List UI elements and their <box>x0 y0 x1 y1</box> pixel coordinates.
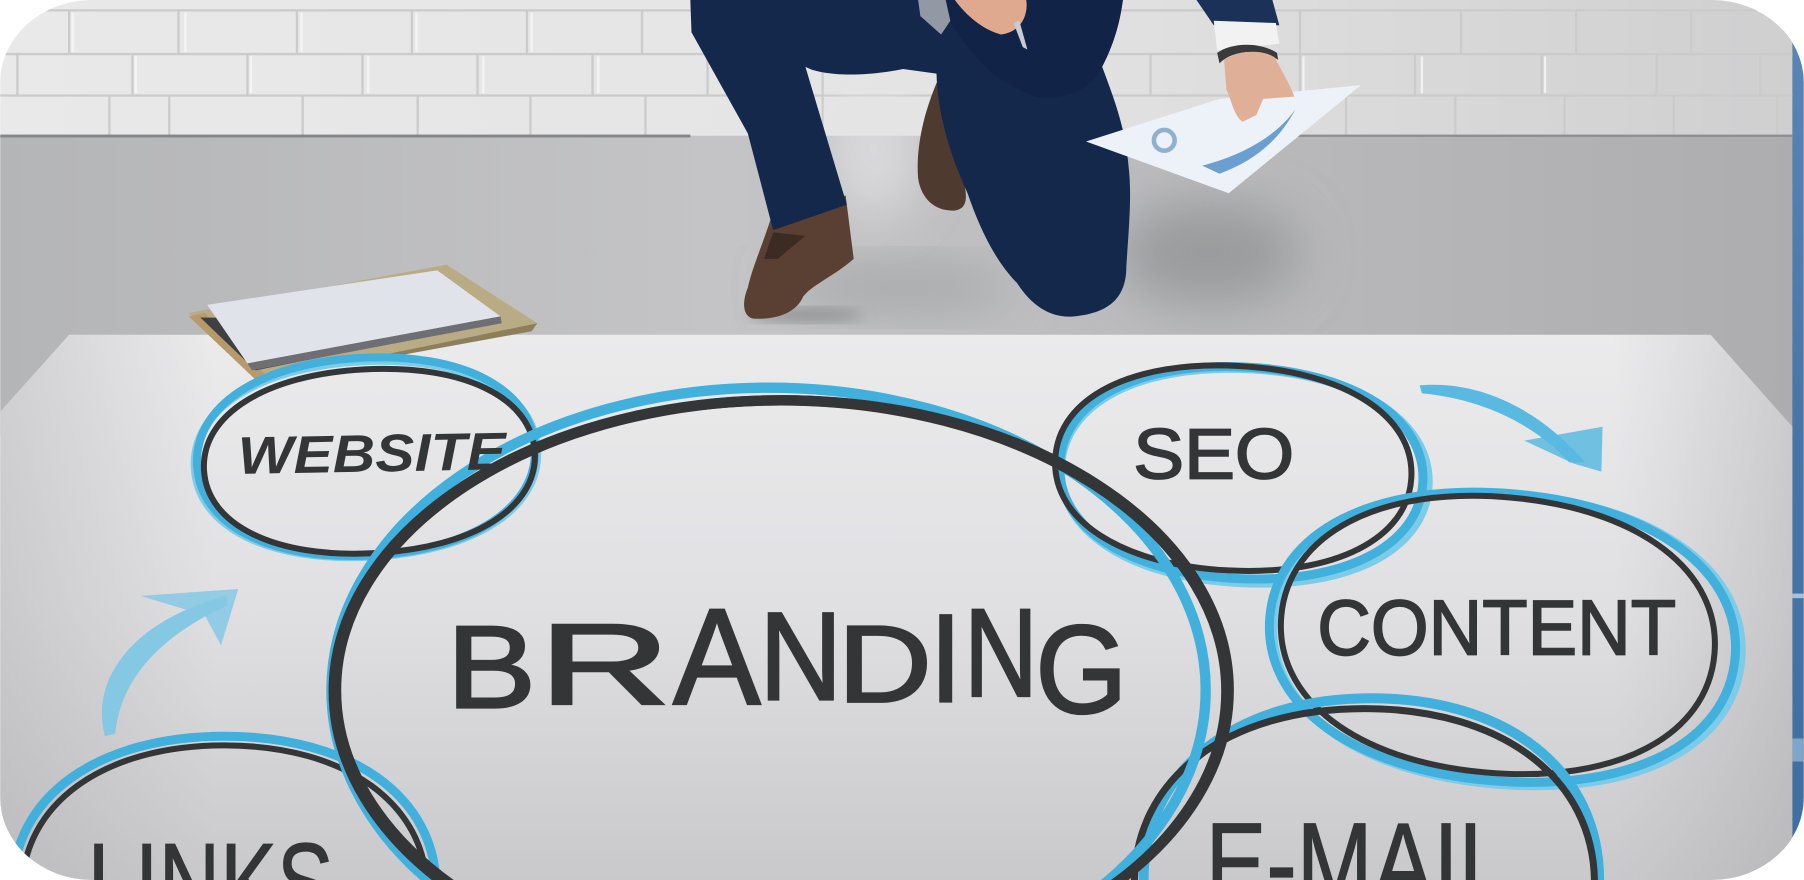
arrow: top right <box>1420 385 1603 472</box>
folder with papers <box>189 265 537 381</box>
front shoe <box>744 196 854 319</box>
circle: links <box>13 736 436 880</box>
label: BRANDING: N <box>964 582 1038 723</box>
tie <box>918 0 950 35</box>
rear shoe <box>918 81 966 211</box>
label: BRANDING: D <box>838 604 932 726</box>
label: BRANDING: N <box>759 585 842 726</box>
label: SEO: SEO <box>1133 415 1294 495</box>
label: CONTENT: CONTENT <box>1317 584 1676 672</box>
circle: branding <box>331 388 1229 880</box>
man's shadow under shoes <box>748 309 863 321</box>
left hand with pen <box>955 0 1027 49</box>
holding hand <box>1224 52 1294 122</box>
shirt cuff and watch <box>1214 21 1279 63</box>
suit trousers and jacket <box>690 0 1130 317</box>
arrow: left <box>102 589 238 736</box>
label: BRANDING: G <box>1035 599 1127 740</box>
blue edge strip <box>1783 0 1804 880</box>
circle: content <box>1264 488 1746 790</box>
businessman kneeling <box>690 0 1279 319</box>
label: BRANDING: I <box>930 588 962 729</box>
white sheet on floor <box>0 335 1792 880</box>
label: BRANDING: R <box>538 601 671 729</box>
circle: e-mail <box>1134 698 1599 880</box>
circle: website <box>190 349 542 566</box>
label: BRANDING: A <box>673 581 761 734</box>
document with chart <box>1086 85 1361 193</box>
grey floor <box>0 81 1792 435</box>
label: BRANDING: B <box>446 601 536 732</box>
label: BRANDING <box>456 608 1120 716</box>
circle: SEO <box>1050 357 1434 593</box>
right arm <box>1196 0 1279 25</box>
label: WEBSITE: WEBSITE <box>237 422 508 486</box>
brick wall <box>0 0 1792 137</box>
